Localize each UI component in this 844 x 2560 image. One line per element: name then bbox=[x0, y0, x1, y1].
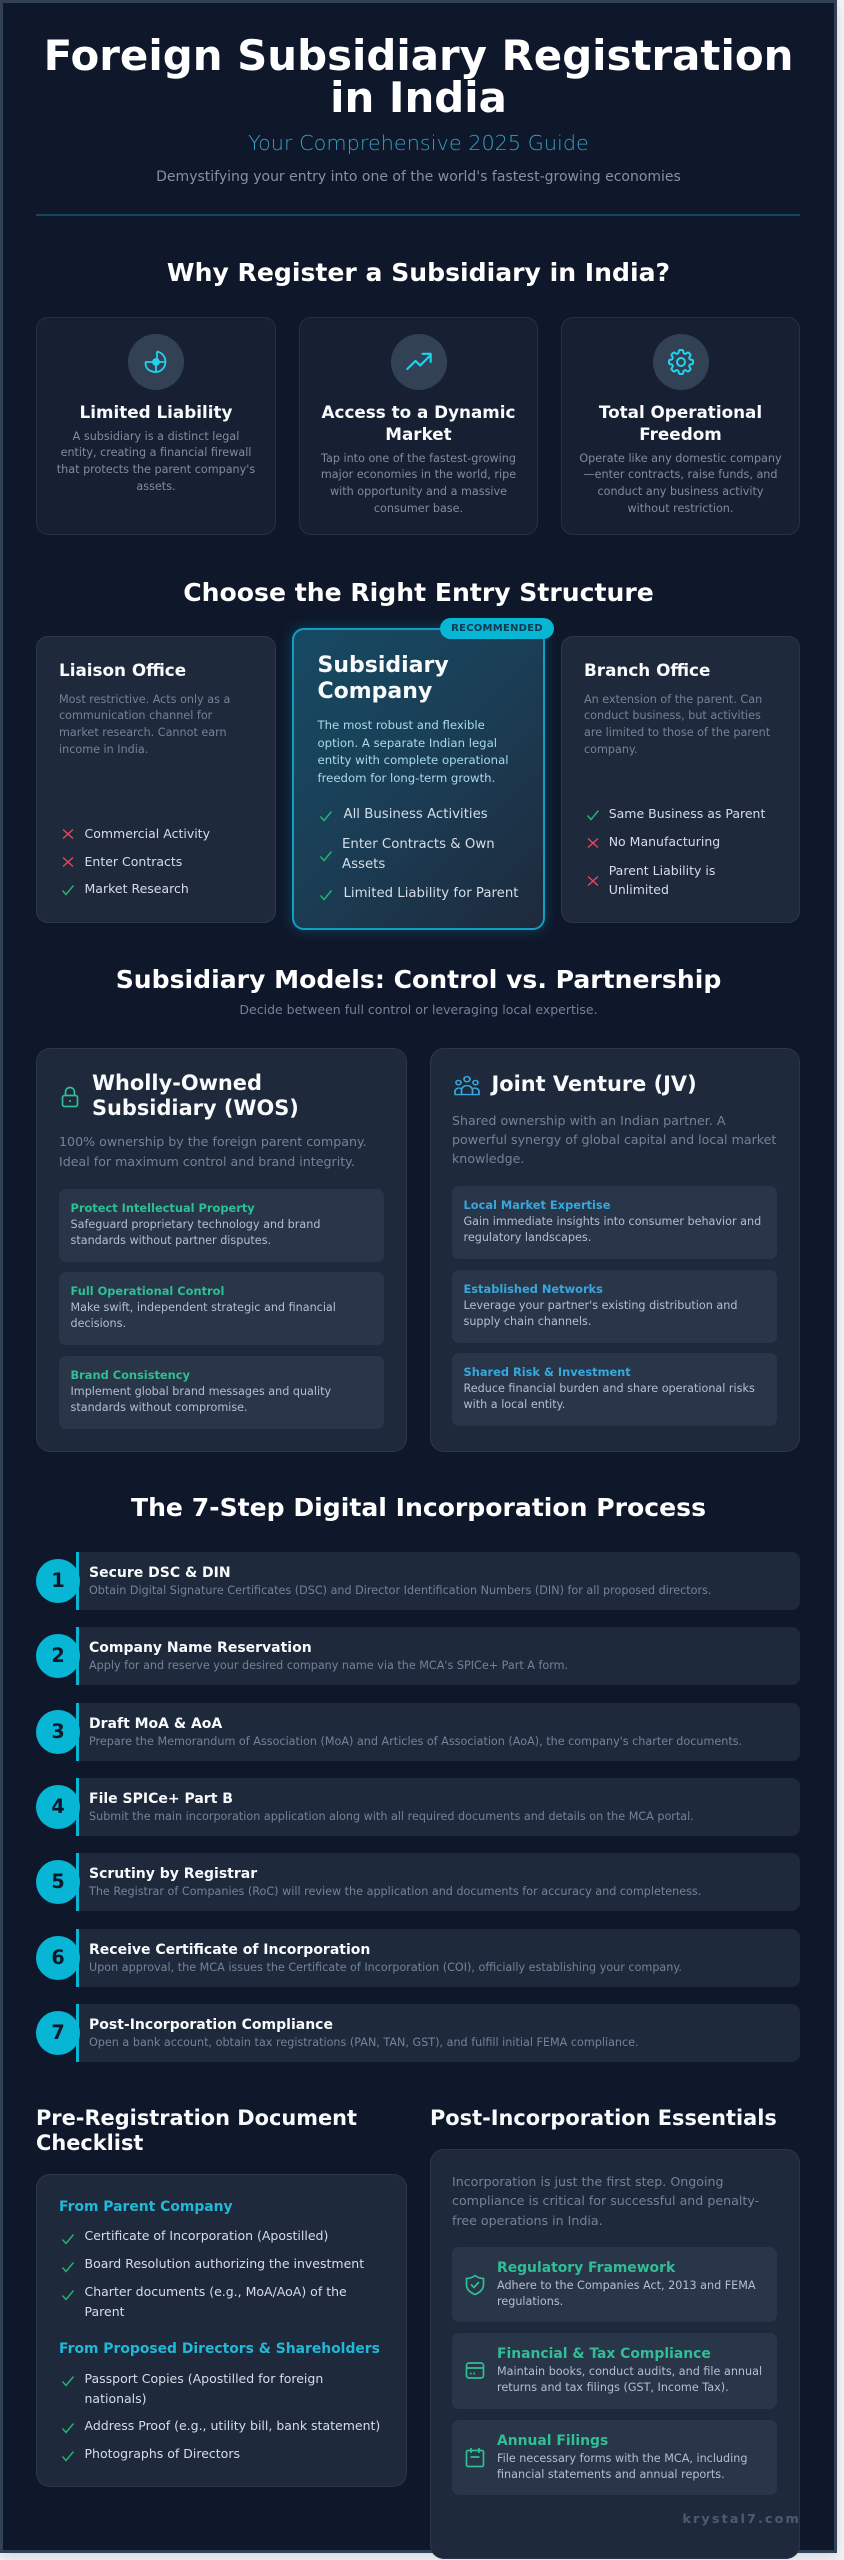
check icon bbox=[320, 851, 332, 862]
check icon bbox=[62, 885, 74, 896]
box text: regulations. bbox=[497, 2295, 563, 2308]
benefit text: decisions. bbox=[70, 1317, 126, 1330]
benefit text: Safeguard proprietary technology and brand bbox=[70, 1218, 320, 1230]
feature item: Commercial Activity bbox=[84, 826, 210, 841]
panel: dynamic market bbox=[299, 317, 538, 535]
step title: Scrutiny by Registrar bbox=[89, 1866, 257, 1882]
card title bbox=[322, 402, 515, 444]
step number: 1 bbox=[51, 1569, 65, 1592]
step title: Company Name Reservation bbox=[89, 1640, 312, 1656]
icon: people bbox=[454, 1076, 480, 1096]
panel text: company. bbox=[584, 743, 638, 756]
box title: Regulatory Framework bbox=[497, 2260, 675, 2276]
step text: Submit the main incorporation application along with all required documents and details on the MCA portal. bbox=[89, 1810, 694, 1823]
icon: shield check bbox=[465, 2274, 485, 2296]
step number bbox=[36, 2011, 80, 2055]
heading: why register: Why Register a Subsidiary in India? bbox=[167, 258, 670, 287]
feature item: Same Business as Parent bbox=[609, 806, 765, 821]
benefit text bbox=[70, 1300, 336, 1330]
benefit text: Make swift, independent strategic and financial bbox=[70, 1300, 336, 1314]
benefit title: Full Operational Control bbox=[70, 1284, 224, 1298]
step 5 bbox=[36, 1853, 800, 1911]
panel: post-incorporation essentials bbox=[430, 2149, 800, 2559]
feature item: Limited Liability for Parent bbox=[344, 886, 518, 901]
benefit text: supply chain channels. bbox=[464, 1315, 591, 1328]
step number: 7 bbox=[51, 2021, 65, 2044]
step title: File SPICe+ Part B bbox=[89, 1791, 233, 1807]
benefit title: Shared Risk & Investment bbox=[464, 1364, 631, 1378]
panel text bbox=[59, 693, 230, 756]
checklist item: Board Resolution authorizing the investment bbox=[84, 2256, 364, 2271]
panel text: Incorporation is just the first step. Ongoing bbox=[452, 2174, 724, 2188]
panel title: Wholly-Owned bbox=[92, 1070, 262, 1094]
box text: Maintain books, conduct audits, and file annual bbox=[497, 2364, 762, 2378]
title: in India bbox=[330, 73, 507, 122]
card text: consumer base. bbox=[374, 502, 463, 515]
benefit text bbox=[464, 1298, 737, 1328]
box text: returns and tax filings (GST, Income Tax). bbox=[497, 2381, 729, 2394]
panel title: Liaison Office bbox=[59, 660, 186, 680]
card text: —enter contracts, raise funds, and bbox=[583, 468, 778, 481]
title bbox=[44, 31, 793, 122]
step number bbox=[36, 1559, 80, 1603]
card text: Tap into one of the fastest-growing bbox=[321, 452, 516, 465]
panel: limited liability bbox=[36, 317, 276, 535]
benefit box bbox=[452, 1186, 777, 1258]
panel title: Joint Venture (JV) bbox=[492, 1072, 697, 1096]
title: Foreign Subsidiary Registration bbox=[44, 31, 793, 80]
panel text: An extension of the parent. Can bbox=[584, 693, 762, 706]
panel: wholly-owned subsidiary bbox=[36, 1048, 407, 1452]
cross icon bbox=[62, 857, 74, 867]
checklist item: Certificate of Incorporation (Apostilled) bbox=[84, 2228, 328, 2243]
box text bbox=[497, 2450, 747, 2484]
check icon bbox=[61, 2421, 75, 2435]
heading: document checklist bbox=[36, 2106, 357, 2154]
panel text: communication channel for bbox=[59, 709, 212, 722]
icon: calendar bbox=[465, 2447, 485, 2469]
card text bbox=[57, 430, 255, 493]
heading: document checklist: Checklist bbox=[36, 2130, 143, 2154]
check icon bbox=[61, 2374, 75, 2388]
panel: liaison office bbox=[36, 636, 276, 923]
box title: Annual Filings bbox=[497, 2433, 608, 2449]
panel: subsidiary company bbox=[292, 628, 545, 930]
feature item: Market Research bbox=[84, 881, 189, 896]
icon: trend arrow bbox=[391, 334, 447, 390]
panel text: knowledge. bbox=[452, 1151, 524, 1166]
subtitle: Your Comprehensive 2025 Guide bbox=[248, 131, 589, 155]
feature item: Enter Contracts bbox=[84, 854, 182, 869]
benefit text: Gain immediate insights into consumer behavior and bbox=[464, 1214, 761, 1228]
step text: Upon approval, the MCA issues the Certificate of Incorporation (COI), officially establishing your company. bbox=[89, 1961, 682, 1974]
benefit text: standards without compromise. bbox=[70, 1401, 248, 1414]
heading: entry structure: Choose the Right Entry Structure bbox=[183, 578, 654, 607]
card text: that protects the parent company's bbox=[57, 463, 255, 476]
checklist item: nationals) bbox=[84, 2390, 147, 2406]
benefit title: Established Networks bbox=[464, 1282, 603, 1296]
step 2 bbox=[36, 1627, 800, 1685]
card title: Total Operational bbox=[599, 402, 762, 422]
panel text: are limited to those of the parent bbox=[584, 726, 770, 739]
panel title: Branch Office bbox=[584, 660, 710, 680]
step title: Post-Incorporation Compliance bbox=[89, 2017, 333, 2033]
checklist group heading: From Parent Company bbox=[59, 2199, 233, 2215]
checklist item: Address Proof (e.g., utility bill, bank statement) bbox=[84, 2418, 380, 2433]
card text bbox=[579, 452, 782, 515]
benefit title: Local Market Expertise bbox=[464, 1198, 610, 1212]
heading: process: The 7-Step Digital Incorporation Process bbox=[131, 1493, 706, 1522]
feature item: Parent Liability is bbox=[609, 862, 715, 878]
step 3 bbox=[36, 1703, 800, 1761]
panel text: Most restrictive. Acts only as a bbox=[59, 693, 230, 706]
step text: Apply for and reserve your desired company name via the MCA's SPICe+ Part A form. bbox=[89, 1659, 568, 1672]
panel text: powerful synergy of global capital and local market bbox=[452, 1132, 776, 1147]
benefit text: regulatory landscapes. bbox=[464, 1231, 591, 1244]
card text: without restriction. bbox=[628, 502, 733, 515]
step title: Draft MoA & AoA bbox=[89, 1716, 222, 1732]
benefit text bbox=[464, 1214, 761, 1244]
panel text: income in India. bbox=[59, 743, 148, 756]
step 7 bbox=[36, 2004, 800, 2062]
step number: 4 bbox=[51, 1795, 65, 1818]
step number bbox=[36, 1860, 80, 1904]
card text: assets. bbox=[136, 480, 176, 493]
heading: document checklist: Pre-Registration Document bbox=[36, 2106, 357, 2130]
panel text bbox=[317, 718, 508, 785]
panel text: 100% ownership by the foreign parent company. bbox=[59, 1134, 367, 1149]
box title: Financial & Tax Compliance bbox=[497, 2346, 711, 2362]
card title: Limited Liability bbox=[80, 402, 232, 422]
panel: checklist bbox=[36, 2174, 407, 2487]
checklist group heading: From Proposed Directors & Shareholders bbox=[59, 2341, 380, 2357]
step number: 6 bbox=[51, 1946, 65, 1969]
card text: major economies in the world, ripe bbox=[321, 468, 516, 481]
section subtitle: Decide between full control or leveraging local expertise. bbox=[239, 1002, 598, 1017]
cross icon bbox=[62, 829, 74, 839]
box text bbox=[497, 2278, 756, 2311]
watermark: krystal7.com bbox=[682, 2512, 801, 2527]
checklist item: Charter documents (e.g., MoA/AoA) of the bbox=[84, 2284, 347, 2299]
checklist item bbox=[84, 2369, 323, 2408]
check icon bbox=[61, 2288, 75, 2302]
feature item bbox=[342, 837, 495, 872]
step title: Secure DSC & DIN bbox=[89, 1565, 231, 1581]
feature item: Enter Contracts & Own bbox=[342, 837, 495, 852]
box text: File necessary forms with the MCA, including bbox=[497, 2452, 747, 2464]
benefit title: Protect Intellectual Property bbox=[70, 1200, 255, 1214]
panel text bbox=[584, 693, 770, 756]
panel title: Company bbox=[318, 679, 432, 704]
panel title bbox=[318, 653, 449, 704]
check icon bbox=[61, 2232, 75, 2246]
benefit text: Leverage your partner's existing distribution and bbox=[464, 1298, 737, 1312]
step number bbox=[36, 1710, 80, 1754]
checklist item: Photographs of Directors bbox=[84, 2446, 240, 2461]
checklist item: Parent bbox=[84, 2304, 125, 2319]
benefit text bbox=[464, 1382, 755, 1411]
box: regulatory framework bbox=[452, 2247, 777, 2322]
step number: 5 bbox=[51, 1870, 65, 1893]
benefit text bbox=[70, 1384, 331, 1414]
card text bbox=[321, 452, 516, 515]
recommended badge: RECOMMENDED bbox=[451, 623, 543, 634]
step text: The Registrar of Companies (RoC) will review the application and documents for accuracy and completeness. bbox=[89, 1885, 701, 1898]
panel text: Shared ownership with an Indian partner. A bbox=[452, 1112, 725, 1128]
panel text: conduct business, but activities bbox=[584, 709, 761, 722]
check icon bbox=[320, 890, 332, 900]
card text: with opportunity and a massive bbox=[330, 485, 507, 498]
step text: Obtain Digital Signature Certificates (DSC) and Director Identification Numbers (DIN) for all proposed directors. bbox=[89, 1584, 711, 1597]
panel text: freedom for long-term growth. bbox=[318, 771, 495, 785]
feature item: Assets bbox=[342, 857, 385, 872]
benefit title: Brand Consistency bbox=[70, 1368, 190, 1382]
box: financial compliance bbox=[452, 2333, 777, 2409]
check icon bbox=[587, 810, 599, 820]
panel text: Ideal for maximum control and brand integrity. bbox=[59, 1154, 355, 1168]
check icon bbox=[61, 2449, 75, 2463]
box: annual filings bbox=[452, 2420, 777, 2495]
step number bbox=[36, 1936, 80, 1980]
panel: joint venture bbox=[430, 1048, 800, 1452]
card text: A subsidiary is a distinct legal bbox=[73, 430, 239, 443]
panel title bbox=[92, 1070, 299, 1120]
benefit text: Reduce financial burden and share operational risks bbox=[464, 1382, 755, 1394]
card text: entity, creating a financial firewall bbox=[61, 446, 251, 459]
step title: Receive Certificate of Incorporation bbox=[89, 1942, 370, 1958]
step number: 3 bbox=[51, 1720, 65, 1743]
panel text: option. A separate Indian legal bbox=[318, 736, 497, 750]
panel text: market research. Cannot earn bbox=[59, 726, 227, 739]
checklist item: Passport Copies (Apostilled for foreign bbox=[84, 2371, 323, 2386]
step number: 2 bbox=[51, 1644, 65, 1667]
panel title: Subsidiary bbox=[318, 653, 449, 678]
panel text bbox=[452, 2172, 759, 2230]
benefit box bbox=[452, 1270, 777, 1342]
panel text: entity with complete operational bbox=[318, 753, 508, 767]
check icon bbox=[320, 811, 332, 822]
panel text: The most robust and flexible bbox=[318, 718, 485, 732]
cross icon bbox=[588, 838, 598, 848]
benefit box bbox=[452, 1353, 777, 1426]
check icon bbox=[61, 2260, 75, 2274]
card title: Freedom bbox=[639, 424, 722, 444]
step text: Open a bank account, obtain tax registrations (PAN, TAN, GST), and fulfill initial FEMA compliance. bbox=[89, 2036, 639, 2049]
benefit text: with a local entity. bbox=[464, 1398, 565, 1411]
box text bbox=[497, 2364, 762, 2397]
panel text: free operations in India. bbox=[452, 2212, 603, 2228]
icon: card bbox=[465, 2360, 485, 2382]
panel: branch office bbox=[561, 636, 800, 923]
card title: Market bbox=[385, 424, 452, 444]
heading: post-incorporation: Post-Incorporation Essentials bbox=[430, 2106, 777, 2130]
card title: Access to a Dynamic bbox=[322, 402, 515, 422]
icon: lock bbox=[62, 1086, 78, 1108]
panel: operational freedom bbox=[561, 317, 800, 535]
benefit text: standards without partner disputes. bbox=[70, 1234, 271, 1247]
feature item: No Manufacturing bbox=[609, 834, 720, 849]
panel text bbox=[452, 1112, 776, 1166]
icon: liability shield bbox=[128, 334, 184, 390]
tagline: Demystifying your entry into one of the world's fastest-growing economies bbox=[156, 169, 681, 185]
box text: financial statements and annual reports. bbox=[497, 2468, 725, 2481]
card text: Operate like any domestic company bbox=[579, 452, 782, 465]
card title bbox=[598, 402, 762, 444]
step text: Prepare the Memorandum of Association (MoA) and Articles of Association (AoA), the company's charter documents. bbox=[89, 1735, 742, 1748]
panel text: compliance is critical for successful and penalty- bbox=[452, 2193, 759, 2208]
step 4 bbox=[36, 1778, 800, 1836]
benefit text bbox=[70, 1218, 320, 1247]
benefit text: Implement global brand messages and quality bbox=[70, 1384, 331, 1398]
panel text bbox=[59, 1134, 367, 1168]
benefit box bbox=[59, 1189, 384, 1262]
card text: conduct any business activity bbox=[597, 485, 764, 498]
step number bbox=[36, 1785, 80, 1829]
panel title: Subsidiary (WOS) bbox=[92, 1096, 299, 1120]
feature item bbox=[609, 862, 715, 896]
cross icon bbox=[588, 876, 598, 886]
recommended badge bbox=[440, 618, 554, 639]
step 1 bbox=[36, 1552, 800, 1610]
step 6 bbox=[36, 1929, 800, 1987]
heading: subsidiary models: Subsidiary Models: Control vs. Partnership bbox=[116, 965, 721, 994]
checklist item bbox=[84, 2282, 347, 2322]
feature item: All Business Activities bbox=[344, 807, 488, 822]
icon: gear bbox=[653, 334, 709, 390]
benefit box bbox=[59, 1272, 384, 1344]
feature item: Unlimited bbox=[609, 882, 669, 896]
box text: Adhere to the Companies Act, 2013 and FEMA bbox=[497, 2278, 756, 2292]
benefit box bbox=[59, 1356, 384, 1428]
step number bbox=[36, 1634, 80, 1678]
